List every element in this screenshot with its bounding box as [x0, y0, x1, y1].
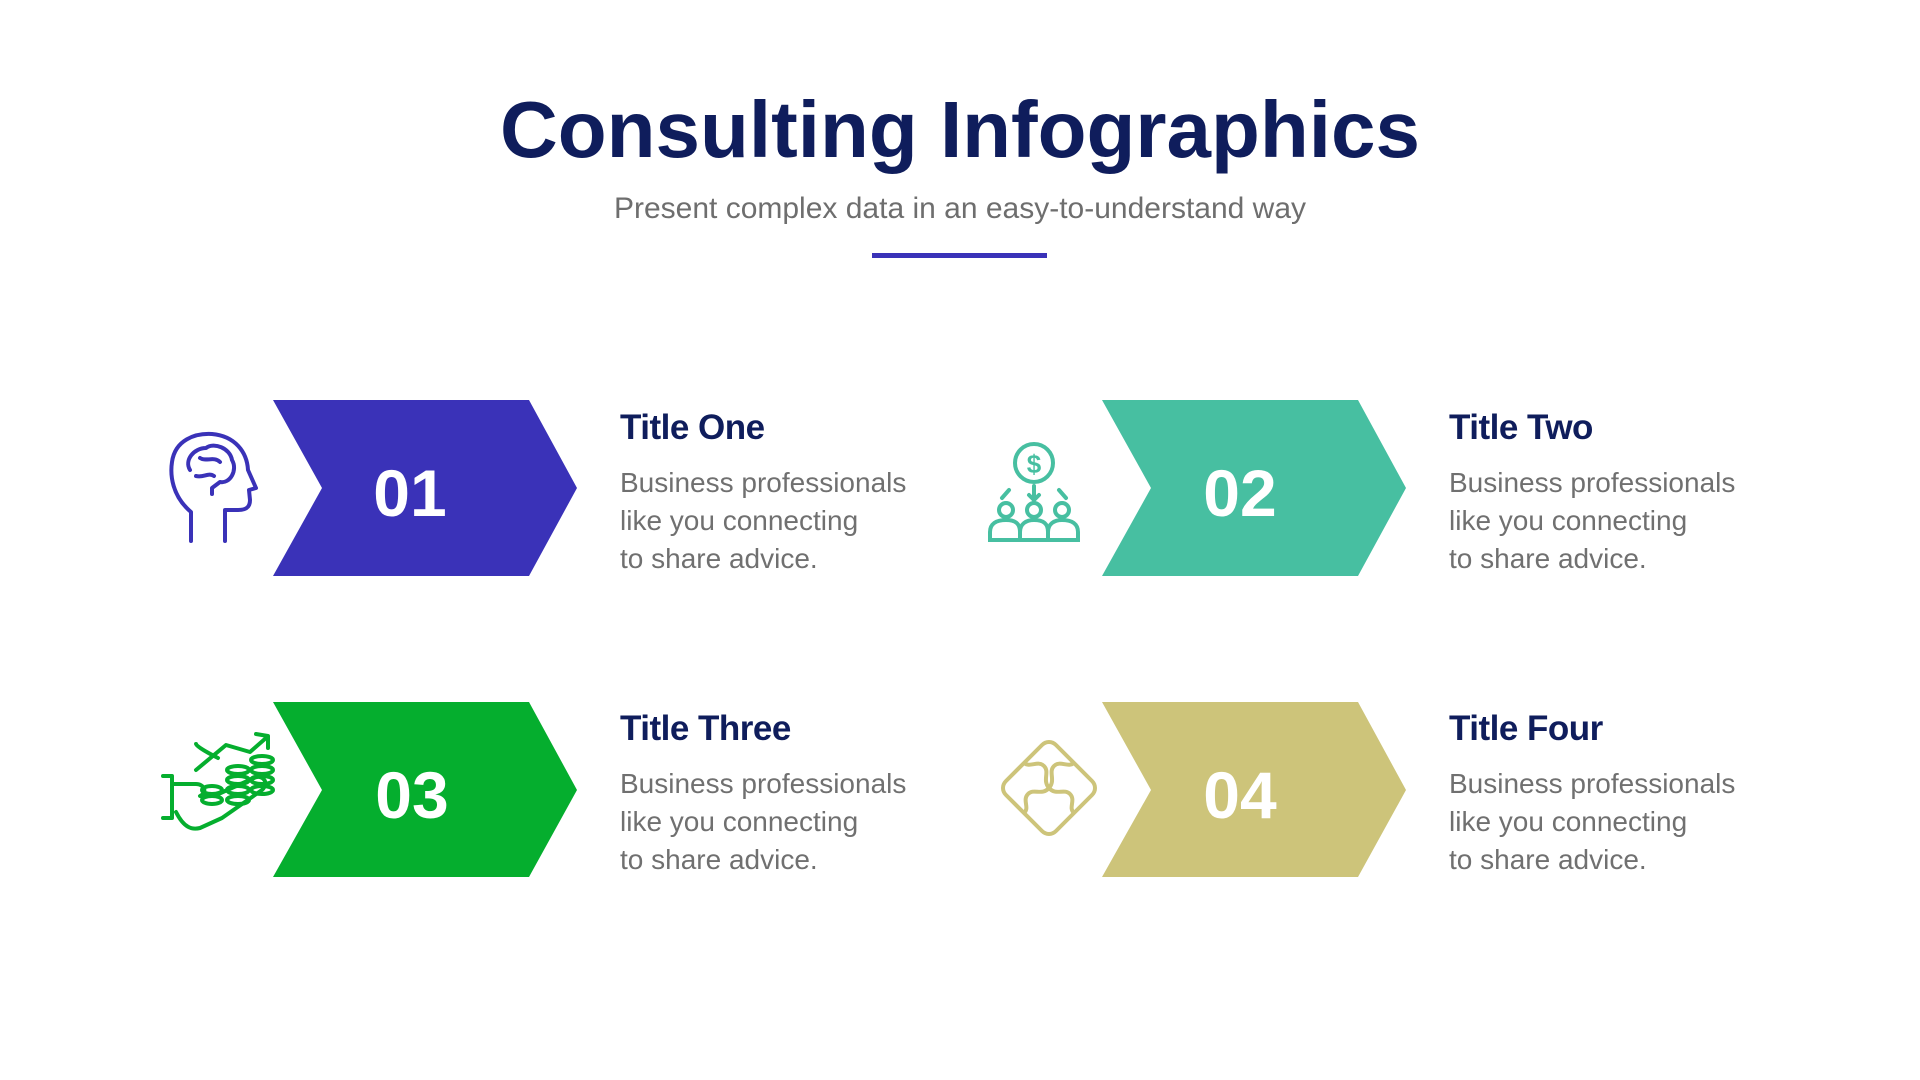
text block: title three: to share advice.	[620, 844, 818, 875]
text block: title one	[620, 408, 906, 574]
icon: hand holding coins with growth arrow	[163, 734, 273, 829]
text block: title three: Title Three	[620, 709, 791, 748]
underline accent	[872, 253, 1047, 258]
text block: title two: to share advice.	[1449, 543, 1647, 574]
text block: title three: like you connecting	[620, 806, 858, 837]
chevron 03	[273, 702, 577, 877]
text block: title one: Business professionals	[620, 467, 906, 498]
text block: title one: Title One	[620, 408, 765, 447]
icon: dollar coin and people: $	[1027, 449, 1042, 479]
chevron 02	[1102, 400, 1406, 576]
icon: puzzle diamond	[1003, 742, 1095, 834]
text block: title two: Business professionals	[1449, 467, 1735, 498]
chevron 02: 02	[1203, 456, 1277, 530]
text block: title two: like you connecting	[1449, 505, 1687, 536]
chevron 04	[1102, 702, 1406, 877]
text block: title three	[620, 709, 906, 875]
text block: title four: like you connecting	[1449, 806, 1687, 837]
title: Consulting Infographics	[500, 85, 1420, 174]
text block: title two: Title Two	[1449, 408, 1593, 447]
text block: title four: Title Four	[1449, 709, 1603, 748]
text block: title two	[1449, 408, 1735, 574]
icon: head with brain	[171, 434, 256, 541]
text block: title four	[1449, 709, 1735, 875]
chevron 04: 04	[1203, 758, 1277, 832]
text block: title four: to share advice.	[1449, 844, 1647, 875]
text block: title one: to share advice.	[620, 543, 818, 574]
text block: title four: Business professionals	[1449, 768, 1735, 799]
chevron 03: 03	[375, 758, 449, 832]
subtitle: Present complex data in an easy-to-understand way	[614, 192, 1306, 225]
chevron 01: 01	[373, 456, 447, 530]
icon: dollar coin and people	[990, 444, 1078, 540]
text block: title three: Business professionals	[620, 768, 906, 799]
chevron 01	[273, 400, 577, 576]
text block: title one: like you connecting	[620, 505, 858, 536]
